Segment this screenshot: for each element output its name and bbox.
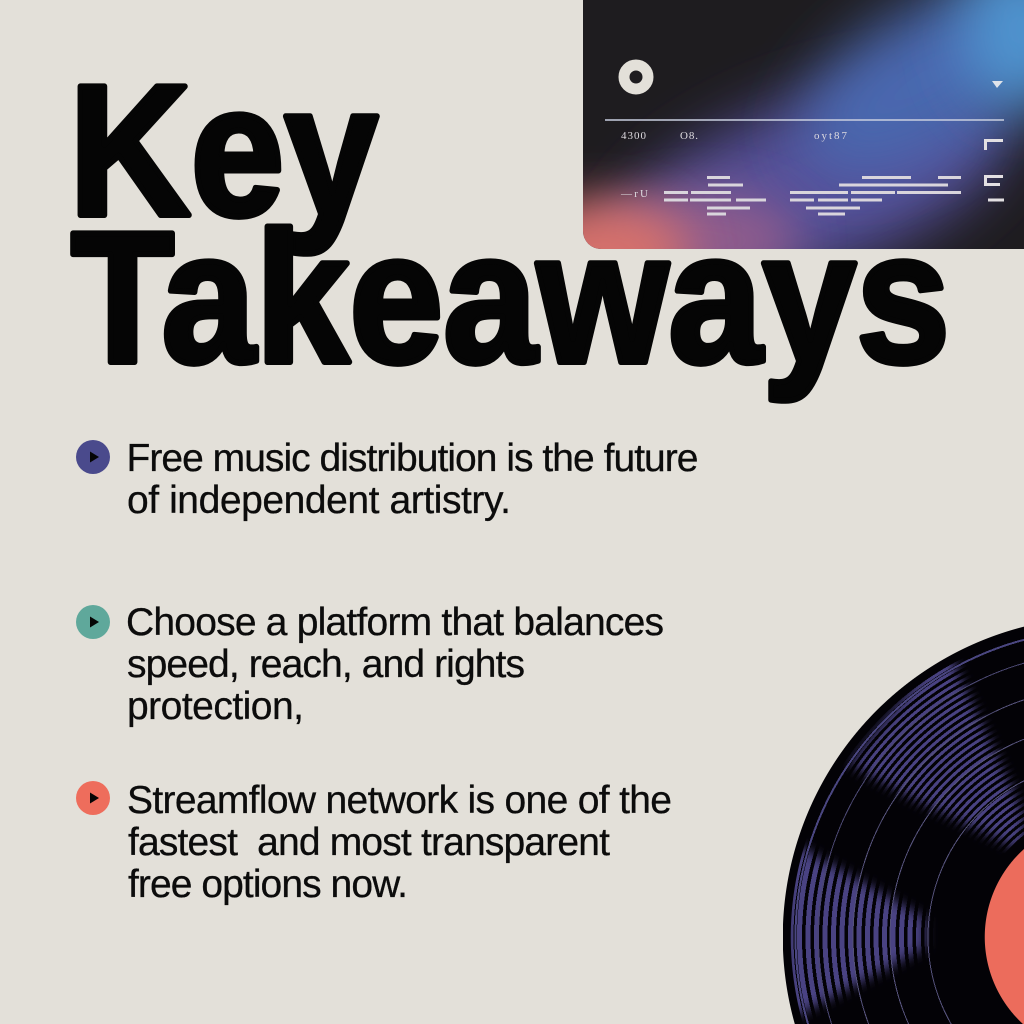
takeaway 3 <box>76 779 672 906</box>
takeaway 3 text <box>127 779 672 906</box>
rim, thin rings and coral label <box>783 617 1024 1024</box>
bullet icon: teal play <box>76 605 110 639</box>
timeline line <box>605 119 1004 121</box>
card labels: O8. <box>680 130 698 142</box>
card labels: oyt87 <box>814 130 848 142</box>
takeaway 1 text <box>126 437 698 522</box>
takeaway 2 text: Choose a platform that balances <box>126 601 664 644</box>
takeaway 3 text: free options now. <box>128 863 408 906</box>
takeaway 2 text: speed, reach, and rights <box>127 643 525 686</box>
title line: Key: Key <box>69 46 378 255</box>
vinyl record <box>783 617 1024 1024</box>
takeaway 2 <box>76 601 664 728</box>
takeaway 3 text: fastest and most transparent <box>128 821 610 864</box>
icon: disc <box>624 65 648 89</box>
takeaway 2 text: protection, <box>127 685 304 728</box>
lower wide grooves <box>794 842 934 1021</box>
card small label left: —rU <box>620 188 648 200</box>
waveform bars <box>664 176 961 216</box>
takeaway 1 text: Free music distribution is the future <box>126 437 698 480</box>
panel: music player card <box>583 0 1024 249</box>
card labels: 4300 <box>621 130 646 142</box>
title <box>69 46 950 404</box>
card labels <box>621 130 848 142</box>
bullet icon: coral play <box>76 781 110 815</box>
takeaway 1 text: of independent artistry. <box>127 479 511 522</box>
title line: Takeaways: Takeaways <box>71 193 950 402</box>
bullet icon: indigo play <box>76 440 110 474</box>
takeaway 2 text <box>126 601 664 728</box>
card gradient glow <box>510 0 1024 335</box>
side glyphs <box>984 139 1004 202</box>
icon: small triangle <box>992 81 1003 88</box>
takeaway 3 text: Streamflow network is one of the <box>127 779 672 822</box>
takeaway 1 <box>76 437 698 522</box>
upper fine grooves <box>846 659 1024 853</box>
groove highlight wedges <box>785 645 1024 1022</box>
